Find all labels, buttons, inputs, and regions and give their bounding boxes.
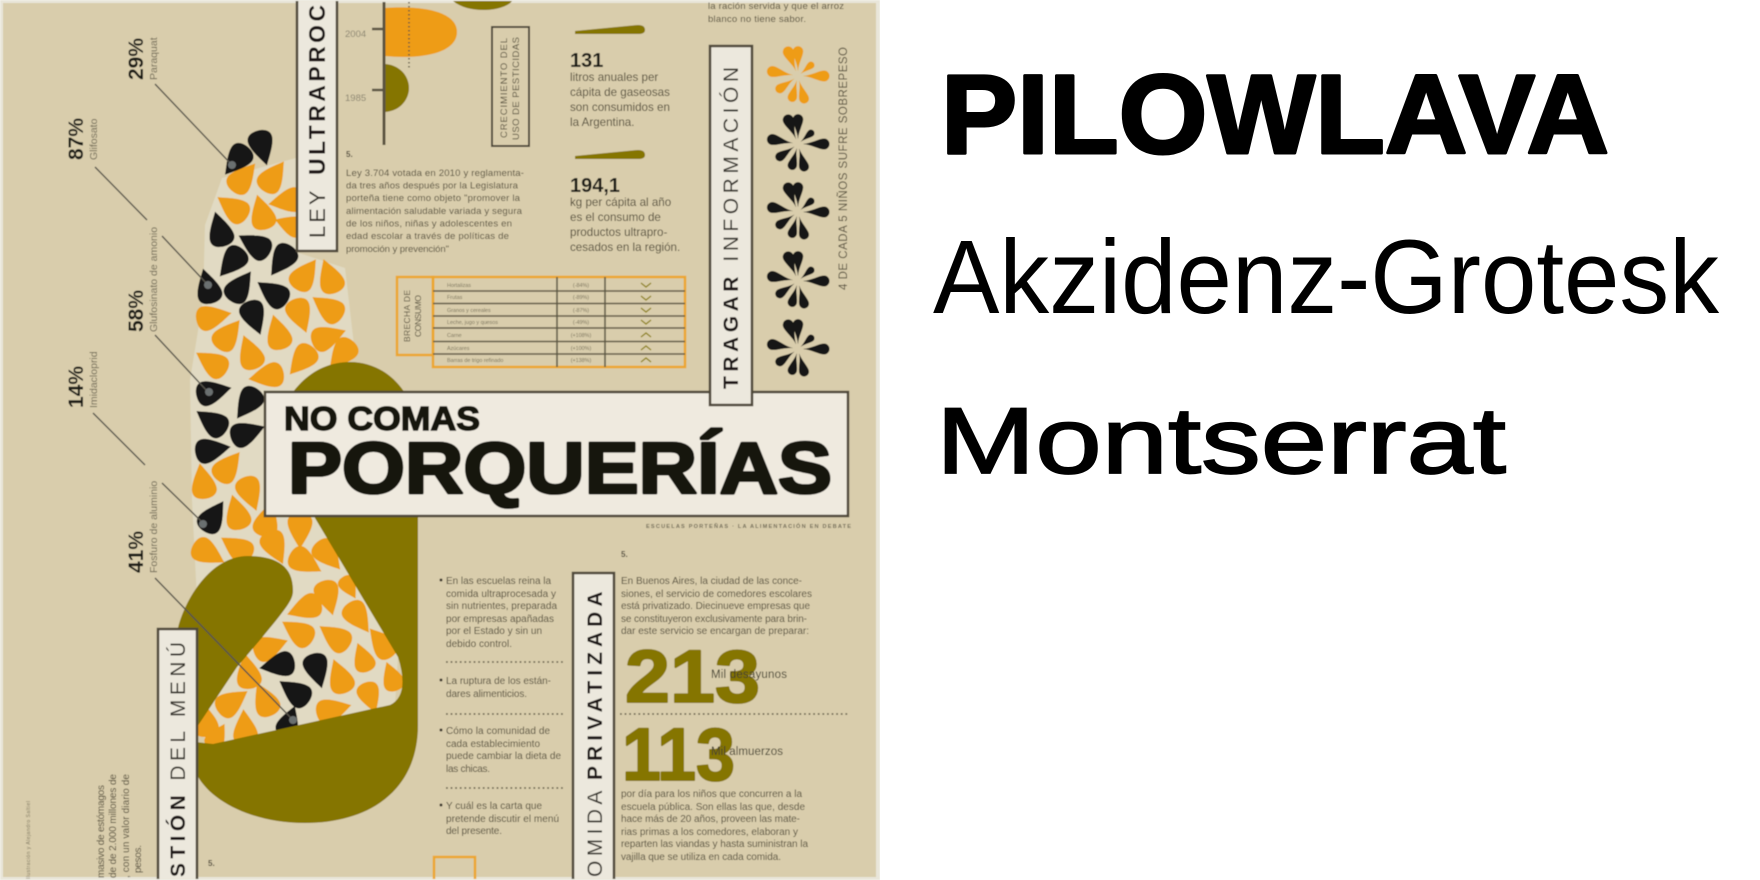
text block: Buenos Aires: está privatizado. Diecinueve empresas que: [621, 601, 810, 612]
callout: Fosfuro de aluminio 41%: [125, 481, 297, 724]
footnote mark: 5.: [208, 859, 215, 868]
label box: crecimiento del uso de pesticidas: [492, 27, 529, 146]
list: bullet points: cada establecimiento: [446, 739, 540, 750]
callout: Glifosato 87%: Glifosato: [88, 118, 100, 160]
text block: rotated left column: de de 2.000 millones de: [108, 774, 119, 878]
stat: 194,1 kg: es el consumo de: [570, 211, 661, 224]
stat: 113 mil almuerzos: Mil almuerzos: [711, 746, 783, 758]
banner: Comida privatizada: [573, 573, 614, 879]
list: bullet points: comida ultraprocesada y: [446, 589, 556, 600]
stat: 194,1 kg: productos ultrapro-: [570, 226, 667, 239]
text block: Buenos Aires: se constituyeron exclusivamente para brin-: [621, 614, 807, 625]
stat: 194,1 kg: cesados en la región.: [570, 241, 680, 254]
text block: Ley 3.704: de los niños, niñas y adolescentes en: [346, 218, 512, 230]
table: brecha de consumo: Carne: [447, 333, 462, 339]
list: bullet points: dares alimenticios.: [446, 689, 527, 700]
text block: top of right column: la ración servida y que el arroz: [708, 1, 844, 12]
table: brecha de consumo: Hortalizas: [447, 283, 471, 289]
chart: growth of pesticide use: 1985: [345, 93, 366, 104]
table: brecha de consumo: (+100%): [571, 346, 591, 352]
label box: crecimiento del uso de pesticidas: USO DE PESTICIDAS: [511, 37, 522, 140]
orange box at bottom: [434, 857, 475, 879]
text block: Buenos Aires: En Buenos Aires, la ciudad de las conce-: [621, 576, 802, 587]
callout: Glufosinato de amonio 58%: Glufosinato de amonio: [148, 227, 160, 332]
banner: Gestión del menú: STIÓN DEL MENÚ: [166, 637, 190, 877]
title box: No comas porquerías: PORQUERÍAS: [288, 429, 832, 509]
table: brecha de consumo: BRECHA DE: [402, 290, 412, 342]
table: brecha de consumo: (-49%): [573, 320, 589, 326]
callout: Imidacloprid 14%: Imidacloprid: [88, 351, 100, 408]
table: brecha de consumo: (-89%): [573, 295, 589, 301]
table: brecha de consumo: (+138%): [571, 358, 591, 364]
banner: Gestión del menú: [158, 629, 197, 879]
stat: 213 mil desayunos: Mil desayunos: [711, 669, 787, 681]
stat: 194,1 kg: [570, 150, 680, 254]
title box: No comas porquerías: NO COMAS: [284, 400, 480, 437]
callout: Paraquat 29%: 29%: [125, 38, 148, 80]
text block: Ley 3.704: alimentación saludable variada y segura: [346, 206, 523, 217]
callout: Paraquat 29%: [125, 37, 236, 169]
stat: 113 mil almuerzos: 113: [622, 713, 735, 796]
callout: Glifosato 87%: 87%: [65, 118, 88, 160]
mosaic: black leaves: [189, 127, 334, 740]
banner: Ley ultraprocesados: [297, 1, 337, 251]
list: bullet points: las chicas.: [446, 764, 490, 775]
banner: Tragar información: TRAGAR INFORMACIÓN: [720, 62, 743, 389]
stat: 213 mil desayunos: [626, 648, 788, 704]
list: bullet points: debido control.: [446, 639, 512, 650]
text block: por día: escuela pública. Son ellas las que, desde: [621, 802, 805, 813]
chart: growth of pesticide use: [345, 1, 512, 145]
callout: Glufosinato de amonio 58%: 58%: [125, 290, 148, 332]
text block: Buenos Aires: [621, 550, 812, 637]
font name: Akzidenz-Grotesk: Akzidenz-Grotesk: [933, 219, 1719, 336]
list: bullet points: [440, 576, 564, 837]
text block: por día: por día para los niños que concurren a la: [621, 789, 802, 800]
text block: por día: rias primas a los comedores, elaboran y: [621, 827, 798, 838]
table: brecha de consumo: Granos y cereales: [447, 308, 491, 314]
font name: Pilowlava: PILOWLAVA: [941, 52, 1609, 177]
callout: Paraquat 29%: Paraquat: [148, 37, 160, 80]
table: brecha de consumo: Leche, jugo y quesos: [447, 320, 498, 326]
list: bullet points: del presente.: [446, 826, 502, 837]
olive upper lobe: [170, 556, 293, 727]
stat: 213 mil desayunos: 213: [625, 635, 760, 718]
label box: crecimiento del uso de pesticidas: CRECIMIENTO DEL: [499, 38, 510, 138]
text block: top of right column: [708, 2, 844, 22]
callout: Imidacloprid 14%: [65, 351, 207, 528]
text block: Ley 3.704: porteña tiene como objeto "promover la: [346, 193, 521, 204]
table: brecha de consumo: Frutas: [447, 295, 463, 301]
panel: infographic poster: [0, 0, 880, 880]
list: bullet points: Y cuál es la carta que: [446, 801, 542, 812]
list: bullet points: por empresas apañadas: [446, 614, 554, 625]
text block: Ley 3.704: Ley 3.704 votada en 2010 y reglamenta-: [346, 168, 524, 179]
text block: por día: hace más de 20 años, proveen las mate-: [621, 814, 800, 825]
font name: Montserrat: Montserrat: [936, 388, 1506, 493]
table: brecha de consumo: (-87%): [573, 308, 589, 314]
stat: 131 litros: son consumidos en: [570, 101, 670, 114]
mosaic background: [190, 158, 398, 744]
table: brecha de consumo: CONSUMO: [413, 295, 423, 337]
list: bullet points: sin nutrientes, preparada: [446, 601, 557, 612]
list: bullet points: por el Estado y sin un: [446, 626, 542, 637]
caption: 4 de cada 5 niños: 4 DE CADA 5 NIÑOS SUFRE SOBREPESO: [837, 47, 850, 290]
text block: Ley 3.704: promoción y prevención": [346, 244, 449, 255]
table: brecha de consumo: (-84%): [573, 283, 589, 289]
text block: rotated left column: masivo de estómagos: [96, 785, 107, 878]
callout: Fosfuro de aluminio 41%: 41%: [125, 531, 148, 573]
title box: No comas porquerías: [265, 392, 848, 516]
table: brecha de consumo: [397, 277, 685, 367]
banner: Comida privatizada: PRIVATIZADA: [584, 587, 607, 780]
text block: rotated left column: , con un valor diario de: [121, 774, 132, 878]
list: bullet points: puede cambiar la dieta de: [446, 751, 561, 762]
text block: Ley 3.704: [346, 150, 524, 255]
text block: Buenos Aires: 5.: [621, 550, 628, 559]
banner: Ley ultraprocesados: LEY: [305, 187, 330, 238]
text block: Ley 3.704: da tres años después por la Legislatura: [346, 180, 519, 192]
list: bullet points: La ruptura de los están-: [446, 676, 551, 687]
text block: Buenos Aires: siones, el servicio de comedores escolares: [621, 589, 812, 600]
text block: rotated left column: pesos.: [133, 845, 144, 873]
text block: Ley 3.704: edad escolar a través de políticas de: [346, 231, 509, 242]
callout: Glifosato 87%: [65, 118, 212, 289]
list: bullet points: Cómo la comunidad de: [446, 726, 550, 737]
callout: Imidacloprid 14%: 14%: [65, 366, 88, 408]
callout: Fosfuro de aluminio 41%: Fosfuro de aluminio: [148, 481, 160, 573]
text block: por día: [621, 789, 808, 863]
icons: flowers, 4 of 5 children: [766, 45, 830, 378]
banner: Ley ultraprocesados: ULTRAPROC: [304, 1, 330, 175]
stat: 131 litros: [570, 25, 670, 129]
stat: 113 mil almuerzos: [624, 726, 784, 782]
text block: rotated left column: [96, 774, 144, 878]
stat: 131 litros: cápita de gaseosas: [570, 86, 670, 99]
stat: 131 litros: litros anuales per: [570, 71, 658, 84]
table: brecha de consumo: Barras de trigo refinado: [447, 358, 503, 364]
text block: por día: vajilla que se utiliza en cada comida.: [621, 852, 781, 863]
list: bullet points: En las escuelas reina la: [446, 576, 551, 587]
callout: Glufosinato de amonio 58%: [125, 227, 213, 396]
text block: Buenos Aires: dar este servicio se encargan de preparar:: [621, 626, 809, 637]
text block: top of right column: blanco no tiene sabor.: [708, 14, 806, 25]
stat: 131 litros: la Argentina.: [570, 116, 634, 129]
stat: 194,1 kg: 194,1: [570, 175, 620, 197]
text block: por día: reparten las viandas y hasta suministran la: [621, 839, 808, 850]
banner: Tragar información: [710, 46, 752, 405]
subheading: escuelas porteñas: ESCUELAS PORTEÑAS · LA ALIMENTACIÓN EN DEBATE: [646, 522, 851, 530]
banner: Comida privatizada: OMIDA: [584, 786, 607, 877]
text block: Ley 3.704: 5.: [346, 150, 353, 159]
chart: growth of pesticide use: 2004: [345, 29, 366, 40]
stat: 131 litros: 131: [570, 50, 603, 72]
table: brecha de consumo: Azúcares: [447, 346, 470, 352]
stat: 194,1 kg: kg per cápita al año: [570, 196, 671, 209]
list: bullet points: pretende discutir el menú: [446, 814, 559, 825]
mosaic: orange leaves: [187, 154, 407, 754]
credit line: Ilustración y Alejandro Saltiel: [26, 801, 32, 879]
olive main blob: [178, 362, 418, 823]
table: brecha de consumo: (+108%): [571, 333, 591, 339]
